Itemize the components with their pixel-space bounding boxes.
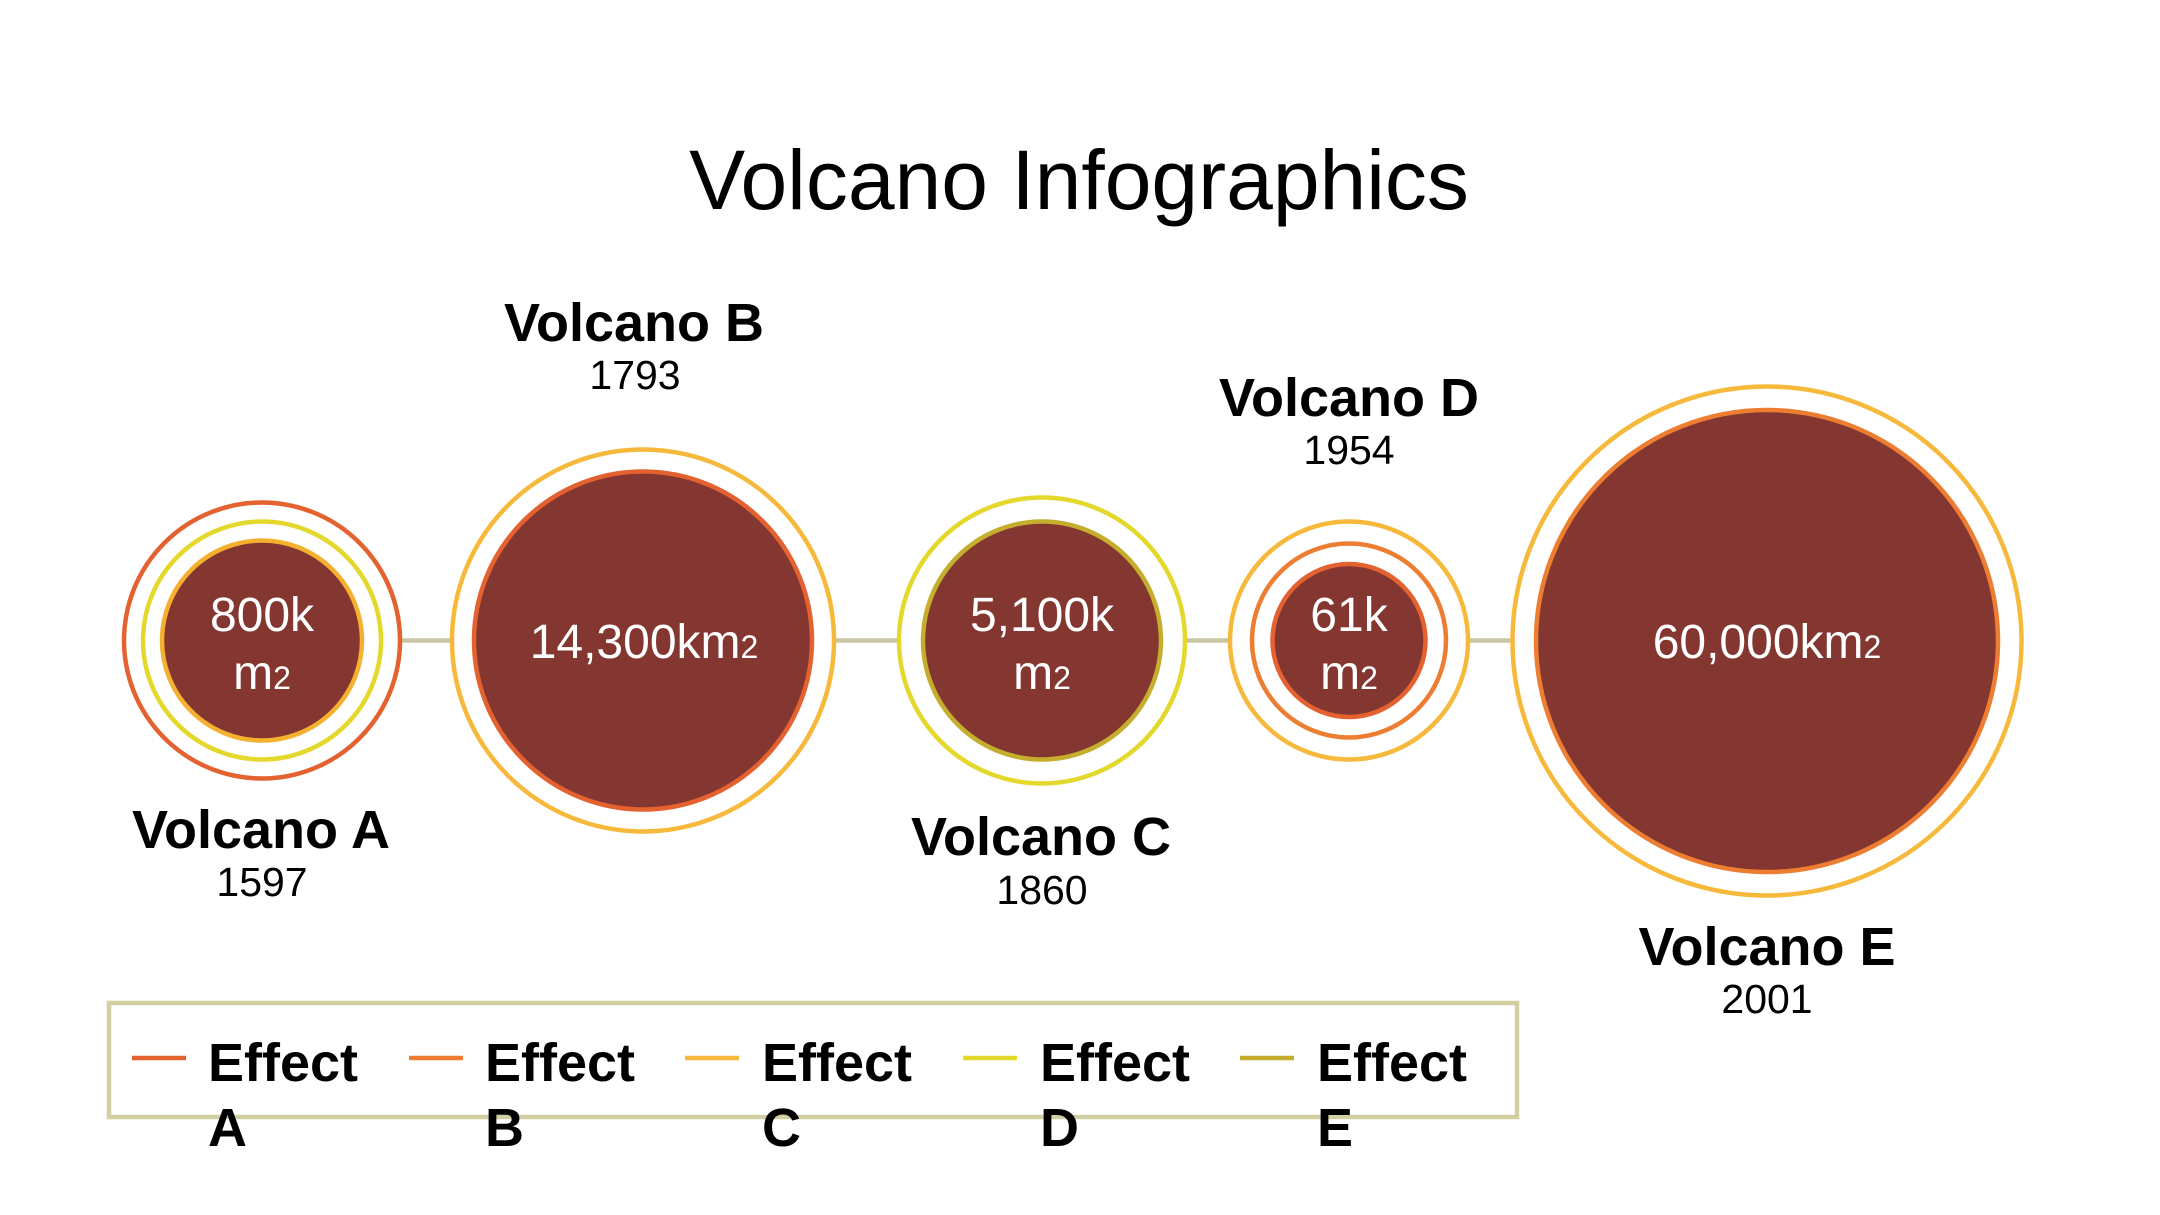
volcano C circle (899, 498, 1185, 784)
volcano A circle: 800k (210, 589, 315, 642)
volcano C circle: 5,100k (970, 589, 1115, 642)
volcano D label: 1954 (1303, 427, 1395, 473)
volcano E label (1638, 917, 1896, 1022)
volcano B label (504, 293, 764, 398)
volcano B label: Volcano B (504, 293, 764, 353)
legend box (109, 1003, 1517, 1117)
volcano D label (1219, 368, 1479, 473)
volcano E circle (1512, 386, 2022, 896)
legend: effect B (409, 1033, 635, 1158)
volcano E circle: 60,000km2 (1653, 616, 1881, 669)
legend: effect C: Effect (762, 1033, 912, 1093)
legend: effect A: A (208, 1098, 247, 1158)
legend: effect B: B (485, 1098, 524, 1158)
volcano E label: 2001 (1721, 976, 1813, 1022)
volcano C label (911, 807, 1171, 913)
volcano A circle (124, 502, 400, 778)
legend: effect C: C (762, 1098, 801, 1158)
legend: effect B: Effect (485, 1033, 635, 1093)
legend: effect D (963, 1033, 1190, 1158)
legend: effect C (685, 1033, 912, 1158)
legend: effect E (1240, 1033, 1467, 1158)
volcano B circle (452, 450, 834, 832)
volcano C label: 1860 (996, 867, 1088, 913)
volcano B label: 1793 (589, 352, 681, 398)
volcano C circle: m2 (1013, 647, 1071, 700)
legend: effect D: D (1040, 1098, 1079, 1158)
legend: effect D: Effect (1040, 1033, 1190, 1093)
legend: effect E: E (1317, 1098, 1353, 1158)
volcano C label: Volcano C (911, 807, 1171, 867)
volcano D label: Volcano D (1219, 368, 1479, 428)
volcano A label: 1597 (216, 859, 308, 905)
volcano A circle: m2 (233, 647, 291, 700)
volcano E label: Volcano E (1638, 917, 1896, 977)
timeline connector (401, 638, 1512, 643)
volcano A label (132, 800, 390, 905)
legend: effect A: Effect (208, 1033, 358, 1093)
volcano D circle (1230, 522, 1468, 760)
legend: effect E: Effect (1317, 1033, 1467, 1093)
volcano A label: Volcano A (132, 800, 390, 860)
volcano B circle: 14,300km2 (530, 616, 758, 669)
volcano D circle: m2 (1320, 647, 1378, 700)
title: Volcano Infographics (689, 133, 1469, 227)
legend: effect A (132, 1033, 358, 1158)
volcano D circle: 61k (1310, 589, 1389, 642)
